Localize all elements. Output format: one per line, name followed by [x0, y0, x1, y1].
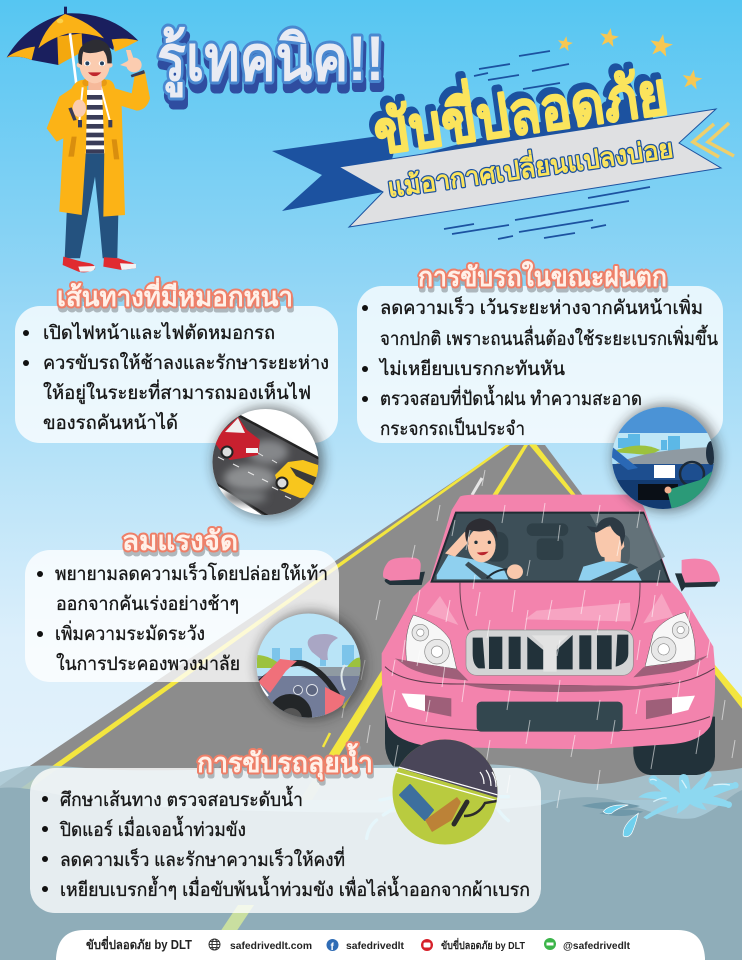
driver — [437, 518, 523, 579]
mirrors — [383, 557, 720, 592]
rain heading: การขับรถในขณะฝนตก — [419, 265, 668, 296]
ribbon banner — [272, 95, 734, 227]
icon: youtube — [421, 939, 433, 951]
windshield — [432, 513, 669, 582]
panel: driving in rain — [357, 261, 723, 443]
icon: facebook — [326, 939, 338, 953]
fog bullets — [23, 322, 329, 434]
raincoat — [47, 72, 150, 217]
rain streaks — [342, 470, 735, 808]
youtube name: ขับขี่ปลอดภัย by DLT — [441, 937, 525, 952]
water bullets — [42, 786, 530, 901]
fog heading: เส้นทางที่มีหมอกหนา — [58, 281, 294, 316]
rain bullets: ตรวจสอบที่ปัดน้ำฝน ทำความสะอาด — [380, 385, 642, 410]
water panel background — [30, 768, 541, 913]
title: รู้เทคนิค!!: รู้เทคนิค!! — [157, 24, 384, 98]
splash — [367, 772, 739, 838]
head — [77, 39, 113, 90]
icon: fog road circle — [205, 407, 324, 535]
title: รู้เทคนิค!!: รู้เทคนิค!! — [159, 32, 386, 106]
wind heading: ลมแรงจัด — [123, 530, 239, 560]
website: safedrivedlt.com — [230, 940, 312, 952]
pink car — [382, 495, 720, 775]
umbrella — [7, 7, 138, 121]
fog bullets: ของรถคันหน้าได้ — [43, 412, 178, 434]
water — [0, 764, 742, 960]
seats — [483, 523, 630, 567]
hood highlights — [525, 603, 631, 621]
water heading: การขับรถลุยน้ำ — [197, 742, 373, 780]
rain bullets — [362, 294, 718, 440]
line id: @safedrivedlt — [563, 940, 630, 952]
wind heading: ลมแรงจัด — [122, 526, 238, 556]
icon: car interior circle — [610, 405, 719, 511]
rain bullets: กระจกรถเป็นประจำ — [380, 416, 525, 440]
wind bullets — [37, 561, 328, 675]
water bullets: เหยียบเบรกย้ำๆ เมื่อขับพ้นน้ำท่วมขัง เพื่อไล่น้ำออกจากผ้าเบรก — [60, 876, 530, 901]
water bullets: ศึกษาเส้นทาง ตรวจสอบระดับน้ำ — [60, 786, 303, 811]
fog bullets: เปิดไฟหน้าและไฟตัดหมอกรถ — [43, 322, 275, 344]
wind bullets: พยายามลดความเร็วโดยปล่อยให้เท้า — [55, 561, 328, 585]
heading: ขับขี่ปลอดภัย: ขับขี่ปลอดภัย — [368, 51, 672, 167]
footer brand: ขับขี่ปลอดภัย by DLT — [86, 936, 192, 952]
panel: fog route — [15, 277, 338, 443]
rain heading: การขับรถในขณะฝนตก — [418, 261, 667, 292]
icon: steering wheel circle — [256, 612, 365, 738]
front grille — [466, 630, 633, 675]
panel: strong wind — [25, 526, 339, 682]
wind panel background — [25, 550, 339, 682]
icon: line — [544, 938, 556, 950]
icon: brake pedal circle — [392, 740, 498, 844]
passenger — [578, 517, 642, 581]
chevrons — [693, 123, 734, 157]
fog bullets: ควรขับรถให้ช้าลงและรักษาระยะห่าง — [43, 352, 329, 374]
road — [0, 445, 742, 810]
water bullets: ลดความเร็ว และรักษาความเร็วให้คงที่ — [60, 846, 345, 871]
headlights — [406, 612, 695, 669]
character with umbrella — [7, 7, 150, 272]
rain panel background — [357, 286, 723, 443]
icon: globe — [209, 939, 220, 950]
bumper details — [385, 655, 714, 732]
legs — [65, 147, 118, 258]
panel: driving through water — [30, 742, 541, 913]
speed lines — [444, 51, 650, 239]
wind bullets: เพิ่มความระมัดระวัง — [55, 620, 205, 645]
wind bullets: ในการประคองพวงมาลัย — [56, 653, 240, 675]
fog bullets: ให้อยู่ในระยะที่สามารถมองเห็นไฟ — [43, 379, 311, 404]
water bullets: ปิดแอร์ เมื่อเจอน้ำท่วมขัง — [59, 816, 246, 841]
car body — [382, 495, 715, 749]
subtitle on ribbon: แม้อากาศเปลี่ยนแปลงบ่อย — [385, 129, 675, 203]
icon: facebook: f — [330, 942, 334, 953]
rain bullets: ไม่เหยียบเบรกกะทันหัน — [378, 358, 565, 380]
footer bar — [56, 930, 705, 960]
hands — [73, 50, 142, 117]
rain bullets: ลดความเร็ว เว้นระยะห่างจากคันหน้าเพิ่ม — [380, 294, 703, 319]
facebook name: safedrivedlt — [346, 940, 404, 952]
tires — [385, 707, 715, 775]
fog panel background — [15, 306, 338, 443]
water heading: การขับรถลุยน้ำ — [198, 746, 374, 784]
heading: ขับขี่ปลอดภัย: ขับขี่ปลอดภัย — [365, 46, 668, 163]
shoes — [63, 257, 136, 272]
shirt — [85, 90, 105, 153]
wind bullets: ออกจากคันเร่งอย่างช้าๆ — [56, 594, 239, 615]
stars — [556, 27, 704, 90]
fog heading: เส้นทางที่มีหมอกหนา — [57, 277, 293, 312]
